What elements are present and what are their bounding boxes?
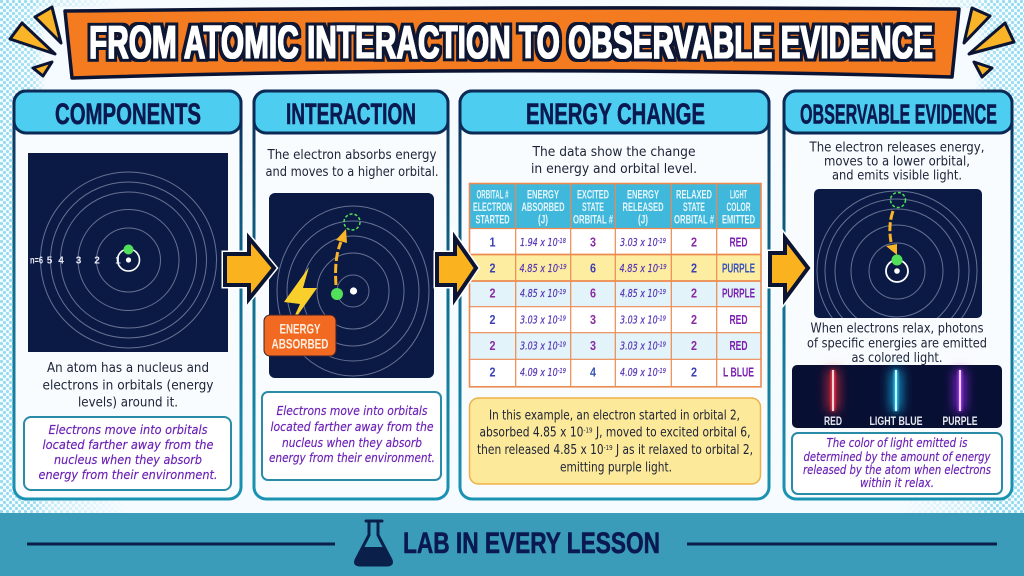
arrow: energy change to evidence	[770, 238, 808, 299]
table row 2 highlighted	[490, 260, 755, 276]
title banner	[65, 8, 959, 78]
table header: EXCITED	[577, 188, 609, 202]
table row 2 highlighted: 2	[691, 260, 697, 276]
table row 5: 3	[590, 338, 596, 353]
callout: worked example: then released 4.85 x 10	[477, 442, 638, 458]
callout: worked example: absorbed 4.85 x 10	[480, 424, 611, 440]
spectrum line: light blue: LIGHT BLUE	[870, 416, 923, 428]
table row 4: 3.03 x 10	[520, 314, 572, 326]
table row 2 highlighted: 4.85 x 10	[620, 262, 672, 275]
table header: (J)	[538, 212, 548, 226]
table header: EMITTED	[722, 212, 755, 226]
label: energy absorbed: ABSORBED	[272, 336, 328, 352]
table row 6: -19	[558, 367, 566, 375]
table row 3: -19	[558, 288, 566, 296]
callout: electrons move: located farther away from the	[42, 437, 214, 452]
table row 4: -19	[658, 314, 666, 322]
callout: electrons move: energy from their environment.	[269, 450, 435, 465]
icon: left burst	[10, 7, 61, 76]
table row 3: PURPLE	[722, 286, 755, 300]
table row 4: 2	[691, 312, 697, 327]
table row 6: 4.09 x 10	[520, 366, 572, 379]
atom diagram: absorption	[264, 193, 434, 378]
table row 3: 2	[490, 286, 496, 300]
table header: COLOR	[726, 200, 751, 214]
table header: STATE	[683, 200, 705, 214]
text: data intro: in energy and orbital level.	[531, 161, 697, 177]
table header: LIGHT	[730, 188, 747, 202]
table row 5: RED	[730, 338, 748, 353]
table row 6: 2	[490, 364, 496, 380]
callout: worked example: J as it relaxed to orbital 2,	[613, 442, 753, 458]
atom diagram: emission	[814, 189, 982, 318]
table row 5: -19	[558, 340, 566, 348]
table header: ORBITAL #	[674, 212, 714, 226]
spectrum line: red: RED	[824, 416, 842, 428]
callout: electrons move	[24, 417, 231, 490]
table header: STATE	[582, 200, 604, 214]
text: electron releases: and emits visible light.	[832, 168, 962, 184]
callout: electrons move: nucleus when they absorb	[282, 435, 422, 450]
table row 2 highlighted: 2	[490, 260, 496, 276]
table row 2 highlighted: -19	[658, 263, 667, 271]
panel: observable evidence	[784, 91, 1012, 499]
arrow: electron drop down	[886, 211, 897, 255]
table row 1: -19	[658, 237, 666, 245]
atom diagram: orbitals n=1 to 6: 2	[94, 256, 100, 266]
text: data intro: The data show the change	[532, 144, 696, 160]
atom diagram: orbitals n=1 to 6: 3	[76, 256, 82, 266]
atom diagram: orbitals n=1 to 6: 5	[47, 256, 53, 266]
table row 3: 4.85 x 10	[520, 287, 572, 300]
footer band	[0, 513, 1024, 576]
text: photons emitted: as colored light.	[852, 350, 942, 366]
heading: energy change: ENERGY CHANGE	[526, 98, 705, 131]
callout: electrons move: Electrons move into orbitals	[48, 422, 208, 437]
atom diagram: orbitals n=1 to 6: 1	[115, 256, 121, 266]
table row 3	[490, 286, 755, 300]
table row 4: -19	[558, 314, 566, 322]
callout: worked example: J, moved to excited orbital 6,	[593, 424, 750, 440]
table row 1: 2	[691, 234, 697, 250]
table row 1: RED	[730, 234, 748, 250]
icon: flask	[356, 521, 392, 565]
footer label: LAB IN EVERY LESSON	[403, 527, 660, 560]
panel: energy change	[460, 91, 769, 499]
panel: components	[14, 91, 241, 499]
heading: components: COMPONENTS	[55, 98, 201, 131]
atom diagram: orbitals n=1 to 6: 4	[58, 256, 64, 266]
text: electron releases: The electron releases energy,	[809, 140, 984, 156]
table header: ENERGY	[627, 188, 659, 202]
text: atom description: An atom has a nucleus and	[47, 360, 209, 376]
atom diagram: orbitals n=1 to 6: n=6	[30, 256, 43, 266]
table row 4: RED	[730, 312, 748, 327]
table row 4	[490, 312, 748, 327]
text: electron absorbs: and moves to a higher orbital.	[266, 164, 438, 180]
table row 1: -18	[558, 237, 566, 245]
text: data intro	[531, 144, 697, 177]
table row 2 highlighted: PURPLE	[722, 260, 755, 276]
table row 5	[490, 338, 748, 353]
callout: color of light: released by the atom when electrons	[803, 463, 991, 477]
table row 1: 3.03 x 10	[620, 236, 672, 249]
table header: ORBITAL #	[573, 212, 613, 226]
table header: ORBITAL #	[476, 188, 509, 202]
table row 4: 3	[590, 312, 596, 327]
table row 1: 1.94 x 10	[520, 236, 572, 249]
table row 2 highlighted: 4.85 x 10	[520, 262, 572, 275]
spectrum lines panel	[792, 365, 1002, 428]
table header: ENERGY	[527, 188, 559, 202]
spectrum line: light blue	[870, 370, 923, 428]
text: atom description: levels) around it.	[78, 394, 178, 410]
text: electron absorbs: The electron absorbs energy	[267, 147, 436, 163]
callout: color of light	[792, 433, 1002, 494]
spectrum line: purple: PURPLE	[942, 416, 978, 428]
text: electron releases: moves to a lower orbital,	[824, 154, 970, 170]
table row 6: 4.09 x 10	[620, 366, 672, 379]
callout: electrons move: nucleus when they absorb	[54, 452, 202, 467]
table header: (J)	[638, 212, 648, 226]
table header	[473, 188, 755, 226]
heading: interaction: INTERACTION	[286, 98, 416, 131]
table row 3: 6	[590, 286, 596, 300]
table row 5: 2	[691, 338, 697, 353]
callout: worked example: emitting purple light.	[560, 460, 672, 476]
icon: right burst	[964, 8, 1014, 77]
callout: electrons move: energy from their environment.	[38, 467, 218, 482]
table row 3: -19	[658, 288, 666, 296]
callout: electrons move: located farther away from the	[270, 419, 434, 434]
atom diagram: orbitals n=1 to 6	[28, 153, 228, 352]
table header: ELECTRON	[473, 200, 512, 214]
table row 4: 2	[490, 312, 496, 327]
callout: worked example: -19	[604, 444, 613, 452]
text: photons emitted: When electrons relax, photons	[810, 320, 984, 336]
icon: lightning bolt	[284, 267, 317, 326]
callout: electrons move: Electrons move into orbitals	[276, 403, 428, 418]
table header: RELAXED	[676, 188, 712, 202]
callout: electrons move	[262, 392, 441, 480]
table row 5: -19	[658, 340, 666, 348]
table row 1	[490, 234, 748, 250]
text: photons emitted	[807, 320, 987, 366]
spectrum line: purple	[942, 370, 978, 428]
table row 6: L BLUE	[723, 364, 754, 380]
label: energy absorbed: ENERGY	[280, 320, 321, 336]
table header: ABSORBED	[522, 200, 565, 214]
text: atom description	[42, 360, 214, 410]
table row 6: -19	[658, 367, 666, 375]
callout: worked example	[470, 398, 760, 484]
table row 2 highlighted: -19	[558, 263, 567, 271]
table row 1: 3	[590, 234, 596, 250]
arrow: components to interaction	[225, 238, 274, 299]
text: electron absorbs	[266, 147, 438, 180]
text: atom description: electrons in orbitals (energy	[42, 378, 214, 394]
table row 4: 3.03 x 10	[620, 314, 672, 326]
text: photons emitted: of specific energies are emitted	[807, 336, 987, 352]
table header: RELEASED	[622, 200, 664, 214]
arrow: electron jump up	[336, 229, 347, 285]
table row 5: 3.03 x 10	[520, 340, 572, 352]
table row 2 highlighted: 6	[590, 260, 596, 276]
panel: interaction	[254, 91, 448, 499]
data table	[470, 184, 761, 387]
table row 5: 2	[490, 338, 496, 353]
label: energy absorbed	[264, 315, 336, 356]
spectrum line: red	[824, 370, 842, 428]
table row 3: 2	[691, 286, 697, 300]
callout: worked example: In this example, an electron started in orbital 2,	[489, 408, 740, 424]
table row 6: 4	[590, 364, 597, 380]
table row 1: 1	[490, 234, 496, 250]
table row 5: 3.03 x 10	[620, 340, 672, 352]
table header: STARTED	[476, 212, 510, 226]
callout: color of light: The color of light emitted is	[826, 436, 968, 450]
table row 3: 4.85 x 10	[620, 287, 672, 300]
callout: color of light: within it relax.	[860, 476, 934, 490]
callout: worked example: -19	[583, 426, 593, 434]
arrow: interaction to energy change	[437, 238, 476, 299]
text: electron releases	[809, 140, 984, 184]
table row 6: 2	[691, 364, 697, 380]
table row 6	[490, 364, 754, 380]
callout: color of light: determined by the amount of energy	[804, 450, 991, 464]
